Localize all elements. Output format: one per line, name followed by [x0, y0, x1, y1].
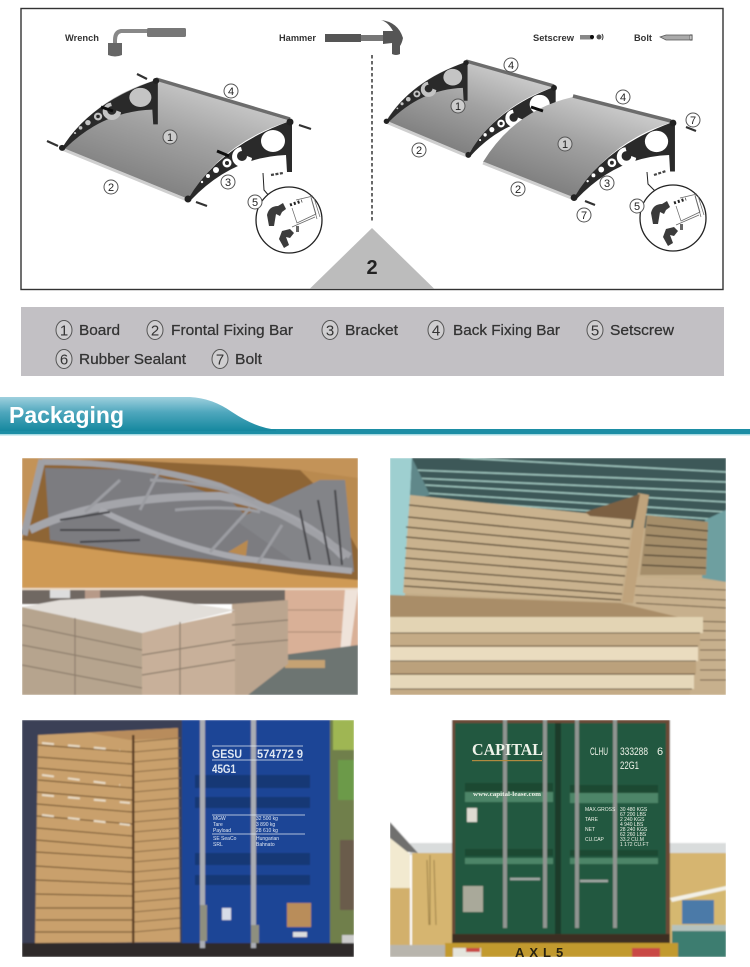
part numbers: joined awnings: 2 [416, 145, 422, 157]
legend row 1: Back Fixing Bar [453, 322, 560, 339]
step marker: triangle with number 2 [310, 228, 434, 288]
container markings: blue: 574772 9 [257, 747, 303, 761]
legend row 1 [56, 320, 674, 340]
icon: bolt [660, 35, 692, 40]
legend row 1: Setscrew [610, 322, 674, 339]
container markings: green: NET [585, 827, 595, 833]
diagram: joined awnings [384, 60, 706, 251]
part numbers: joined awnings: 4 [508, 60, 514, 72]
legend row 1: 5 [591, 322, 599, 340]
diagram: single awning [47, 74, 322, 253]
container markings: green: 1 172 CU.FT [620, 842, 649, 848]
container markings: blue: SRL [213, 842, 223, 848]
container markings: blue: 32 500 kg [256, 816, 278, 822]
photo: loaded blue container [22, 720, 354, 957]
legend row 2: 7 [216, 352, 224, 368]
legend row 2 [56, 350, 263, 368]
legend row 1: 3 [326, 322, 334, 340]
label: wrench: Wrench [65, 33, 99, 43]
part numbers: joined awnings: 5 [634, 201, 640, 213]
part numbers: single awning: 1 [167, 132, 173, 144]
legend row 1: Frontal Fixing Bar [171, 322, 293, 339]
container markings: green: 67 200 LBS [620, 812, 647, 818]
container markings: blue: SE SeaCo [213, 836, 237, 842]
trailer plate text: AXL5 [515, 945, 568, 960]
container markings: blue: Hungarian [256, 836, 279, 842]
heading: Packaging: Packaging [9, 402, 124, 428]
part numbers: joined awnings: 1 [455, 101, 461, 113]
container markings: blue: Payload [213, 828, 231, 834]
label: hammer: Hammer [279, 33, 316, 43]
label: bolt: Bolt [634, 33, 652, 43]
container markings: green: www.capital-lease.com [473, 791, 542, 798]
label: setscrew: Setscrew [533, 33, 575, 43]
container markings: blue: 28 610 kg [256, 828, 278, 834]
container markings: green: TARE [585, 817, 599, 823]
container markings: blue: 45G1 [212, 762, 236, 776]
container markings: blue: Tare [213, 822, 223, 828]
part numbers: joined awnings: 3 [604, 178, 610, 190]
part numbers: single awning: 5 [252, 197, 258, 209]
container markings: blue: GESU [212, 747, 242, 761]
container markings: green: 33.2 CU.M [620, 837, 644, 843]
container markings: green: 333288 [620, 746, 648, 758]
container markings: green: CAPITAL [472, 740, 543, 759]
part numbers: single awning: 2 [108, 182, 114, 194]
part numbers: joined awnings: 4 [620, 92, 626, 104]
photo: green container on trailer [390, 720, 726, 960]
container markings: green: 4 940 LBS [620, 822, 644, 828]
legend row 2: Rubber Sealant [79, 351, 187, 368]
part numbers: joined awnings [412, 58, 700, 222]
photo: boards stacked inside container [390, 458, 726, 695]
container markings: green: CLHU [590, 746, 608, 758]
icon: wrench [108, 28, 186, 56]
container markings: blue [212, 746, 305, 848]
legend row 1: 4 [432, 322, 440, 340]
container markings: blue: 3 890 kg [256, 822, 275, 828]
container markings: green: 22G1 [620, 760, 639, 772]
divider: dashed centre line [371, 55, 373, 221]
container markings: blue: MGW [213, 816, 226, 822]
part numbers: single awning [104, 84, 262, 209]
container markings: green: CU.CAP [585, 837, 605, 843]
panel: installation diagram [21, 8, 723, 290]
container markings: green: 62 260 LBS [620, 832, 647, 838]
part numbers: joined awnings: 1 [562, 139, 568, 151]
container markings: green: 2 240 KGS [620, 817, 645, 823]
container markings: blue: Bahnato [256, 842, 275, 848]
container markings: green: 30 480 KGS [620, 807, 648, 813]
part numbers: joined awnings: 2 [515, 184, 521, 196]
part numbers: joined awnings: 7 [581, 210, 587, 222]
icon: setscrew [580, 34, 603, 40]
panel: parts legend [21, 307, 724, 376]
icon: hammer [325, 20, 403, 55]
legend row 1: Board [79, 322, 120, 339]
container markings: green: 28 240 KGS [620, 827, 648, 833]
legend row 1: 1 [60, 322, 68, 340]
part numbers: joined awnings: 7 [690, 115, 696, 127]
legend row 2: 6 [60, 352, 68, 368]
legend row 1: 2 [151, 322, 159, 340]
part numbers: single awning: 4 [228, 86, 234, 98]
legend row 1: Bracket [345, 322, 399, 339]
legend row 2: Bolt [235, 351, 263, 368]
container markings: green: 6 [657, 746, 663, 758]
container markings: green [472, 740, 663, 848]
section banner: Packaging [0, 397, 750, 436]
step marker: triangle with number 2: 2 [366, 257, 378, 279]
photo: brackets in box and wrapped stacks [22, 458, 358, 695]
container markings: green: MAX.GROSS [585, 807, 616, 813]
part numbers: single awning: 3 [225, 177, 231, 189]
